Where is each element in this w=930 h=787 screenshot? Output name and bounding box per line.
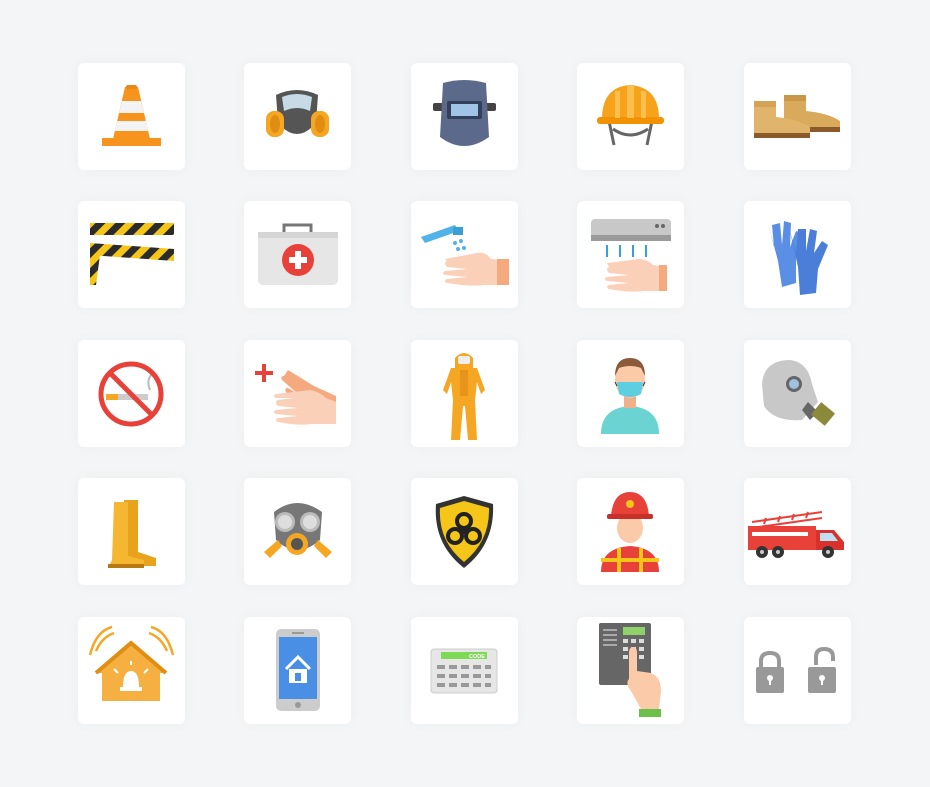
tile: hard hat — [577, 63, 684, 170]
tile: work boots — [744, 63, 851, 170]
tile: biohazard shield — [411, 478, 518, 585]
tile: traffic cone — [78, 63, 185, 170]
tile: firefighter — [577, 478, 684, 585]
tile: hand washing — [411, 201, 518, 308]
tile: hazmat suit — [411, 340, 518, 447]
tile: no smoking — [78, 340, 185, 447]
tile: phone home — [244, 617, 351, 724]
tile: first aid kit — [244, 201, 351, 308]
tile: caution tape — [78, 201, 185, 308]
tile: gas mask front — [244, 478, 351, 585]
tile: rubber boots — [78, 478, 185, 585]
tile: house alarm — [78, 617, 185, 724]
tile: masked person — [577, 340, 684, 447]
tile: welding mask — [411, 63, 518, 170]
tile: hand dryer — [577, 201, 684, 308]
tile: fire truck — [744, 478, 851, 585]
tile: gas mask side — [744, 340, 851, 447]
tile: respirator — [244, 63, 351, 170]
tile: code keypad: CODE — [469, 654, 485, 660]
tile: code keypad — [411, 617, 518, 724]
tile: access panel with hand — [577, 617, 684, 724]
tile: hand sanitizing — [244, 340, 351, 447]
tile: gloves — [744, 201, 851, 308]
tile: padlocks — [744, 617, 851, 724]
